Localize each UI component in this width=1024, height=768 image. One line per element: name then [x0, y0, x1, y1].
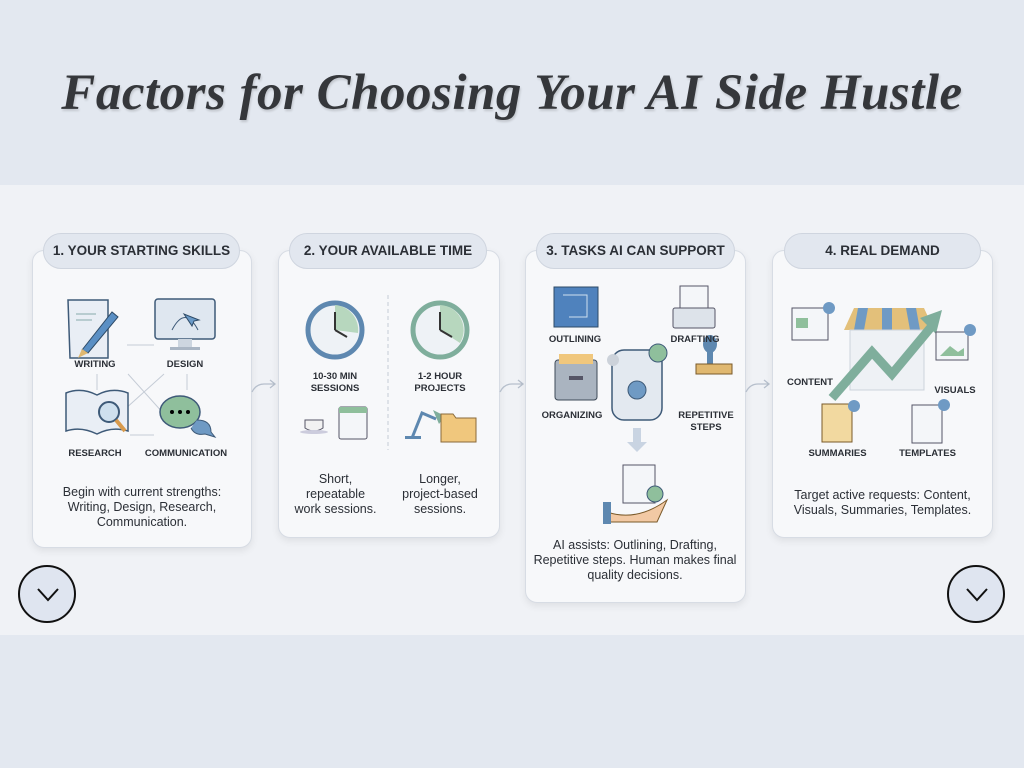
icon: drafting: [673, 286, 715, 328]
icon: short clock: [308, 303, 362, 357]
icon: content: [792, 302, 835, 340]
text: ORGANIZING: [542, 410, 602, 421]
text: COMMUNICATION: [145, 448, 227, 459]
icon: organizing: [555, 354, 597, 400]
labels: time: [311, 371, 359, 394]
panel: real demand: [772, 250, 993, 538]
labels: time: 10-30 MIN: [313, 371, 357, 382]
icon: outlining: [554, 287, 598, 327]
arrow 2-3: [500, 380, 524, 392]
labels: time: SESSIONS: [311, 383, 359, 394]
heading: available time: 2. YOUR AVAILABLE TIME: [304, 243, 472, 258]
heading: real demand: 4. REAL DEMAND: [825, 243, 940, 258]
icon: design: [155, 299, 215, 350]
heading: starting skills: 1. YOUR STARTING SKILLS: [53, 243, 230, 258]
text: VISUALS: [934, 385, 976, 396]
arrow down: [627, 428, 647, 452]
text: demand: Target active requests: Content, Visuals, Summaries, Templates.: [794, 488, 971, 517]
icons: time: [300, 295, 476, 450]
labels: demand: CONTENT: [787, 377, 833, 388]
text: skills: Begin with current strengths: Writing, Design, Research, Communication.: [63, 485, 221, 529]
text: SUMMARIES: [808, 448, 867, 459]
text: RESEARCH: [68, 448, 122, 459]
text: DRAFTING: [670, 334, 720, 345]
text: TEMPLATES: [899, 448, 956, 459]
icons: skills: [65, 298, 216, 438]
icons: AI tasks: [554, 286, 732, 524]
icon: stamp: [696, 335, 732, 374]
heading: available time: [289, 233, 487, 269]
icon: writing: [68, 300, 118, 358]
text: PROJECTS: [414, 383, 466, 394]
text: DESIGN: [167, 359, 203, 370]
icon: lamp & folder: [405, 410, 476, 442]
panel: starting skills: [32, 250, 252, 548]
panel: AI tasks: [525, 250, 746, 603]
arrow 1-2: [252, 380, 276, 392]
icon: hand doc: [603, 465, 667, 524]
text: project-based sessions.: [402, 487, 478, 516]
text: AI tasks: AI assists: Outlining, Drafting, Repetitive steps. Human makes final quality decisions.: [534, 538, 736, 582]
panel: available time: [278, 250, 500, 538]
heading: real demand: [784, 233, 981, 269]
icon: visuals: [936, 324, 976, 360]
button: left chevron: [18, 565, 76, 623]
title: Factors for Choosing Your AI Side Hustle: [61, 65, 963, 121]
text: time: Short, repeatable work sessions.: [294, 472, 376, 516]
icon: summaries: [822, 400, 860, 442]
labels: skills: WRITING: [74, 359, 116, 370]
icon: communication: [160, 396, 215, 437]
text: REPETITIVE: [678, 410, 734, 421]
icon: long clock: [413, 303, 467, 357]
icons: demand: [792, 302, 976, 444]
icon: growth arrow: [832, 310, 942, 398]
icon: robot hand: [607, 344, 667, 420]
heading: starting skills: [43, 233, 240, 269]
text: STEPS: [690, 422, 722, 433]
icon: storefront: [844, 308, 934, 390]
icon: research: [66, 390, 128, 434]
arrow 3-4: [746, 380, 770, 392]
icon: templates: [912, 399, 950, 443]
labels: AI tasks: OUTLINING: [549, 334, 601, 345]
icon: cup & notepad: [300, 407, 367, 439]
text: 1-2 HOUR: [418, 371, 462, 382]
heading: AI tasks: 3. TASKS AI CAN SUPPORT: [546, 243, 725, 258]
heading: AI tasks: [536, 233, 735, 269]
text: Longer,: [419, 472, 461, 486]
button: right chevron: [947, 565, 1005, 623]
